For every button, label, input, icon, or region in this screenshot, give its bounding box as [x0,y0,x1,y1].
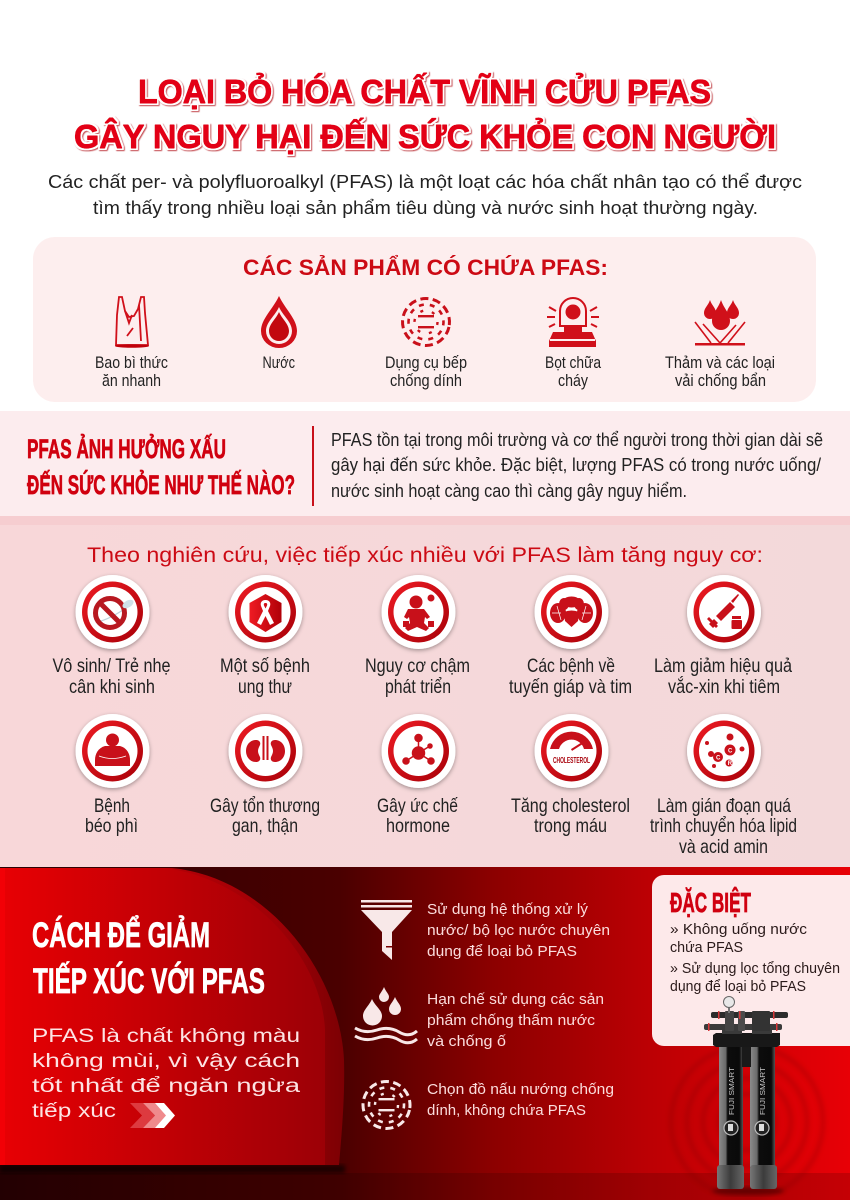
product: Fuji Smart filter: FUJI SMART [758,1067,767,1115]
risk: infertility: Vô sinh/ Trẻ nhẹ [52,655,170,677]
product label: fire foam: Bọt chữa [545,354,602,372]
product label: carpets: vải chống bẩn [675,372,766,390]
product label: carpets: Thảm và các loại [665,354,775,372]
panel: how PFAS affects health [0,411,850,525]
risk: slow development: phát triển [385,676,451,698]
risk: cancer: ung thư [238,676,292,698]
intro text: tìm thấy trong nhiều loại sản phẩm tiêu dùng và nước sinh hoạt thường ngày. [93,198,758,218]
risk: thyroid and heart [509,575,632,698]
risk: cholesterol gauge: Tăng cholesterol [511,795,630,817]
special heading: ĐẶC BIỆT [670,887,751,918]
reduce paragraph: PFAS là chất không màu [32,1026,300,1047]
risk: slow development [365,575,470,698]
reduce paragraph [32,1026,301,1122]
special text: chứa PFAS [670,940,743,956]
product label: packaging [95,354,168,390]
risk: liver and kidney [210,714,320,837]
concentric waves behind filter [671,1046,823,1198]
reduce paragraph: không mùi, vì vậy cách [32,1051,300,1072]
risk: hormone inhibition [377,714,458,837]
icon: non-stick cookware [359,1077,414,1133]
text: filter system: Sử dụng hệ thống xử lý [427,902,589,918]
risk: vaccine efficacy [654,575,792,698]
risk: obesity: béo phì [85,815,138,837]
risk: lipid and amino acid metabolism: R [728,761,733,767]
text: filter system [427,902,610,960]
risk: lipid and amino acid metabolism: và acid amin [679,836,768,858]
risk: vaccine efficacy: vắc-xin khi tiêm [668,675,780,698]
risk: lipid and amino acid metabolism: Làm gián đoạn quá [657,795,791,817]
reduce heading: TIẾP XÚC VỚI PFAS [33,961,265,1001]
risk: thyroid and heart: Các bệnh về [527,655,615,677]
section paragraph: nước sinh hoạt càng cao thì càng gây nguy hiểm. [331,480,687,501]
panel: products containing PFAS [33,237,816,402]
text: filter system: nước/ bộ lọc nước chuyên [427,923,610,939]
title: GÂY NGUY HẠI ĐẾN SỨC KHỎE CON NGƯỜI [74,118,776,155]
product label: water: Nước [262,354,295,372]
risk: cholesterol gauge: trong máu [534,815,607,837]
risk: infertility [52,575,170,698]
special text: dụng để loại bỏ PFAS [670,979,806,995]
risk: lipid and amino acid metabolism [650,714,797,858]
product label: cookware: chống dính [390,372,462,390]
risk: cholesterol gauge [511,714,630,837]
icon: plastic bag [115,297,149,348]
risk: obesity: Bệnh [94,795,130,817]
section heading: ĐẾN SỨC KHỎE NHƯ THẾ NÀO? [27,468,295,500]
icon: water drop [261,296,297,348]
risk: lipid and amino acid metabolism: trình chuyển hóa lipid [650,815,797,837]
product label: carpets [665,354,775,390]
risk: thyroid and heart: tuyến giáp và tim [509,676,632,698]
arrow: chevrons [130,1103,175,1128]
text: choose cookware: Chọn đồ nấu nướng chống [427,1082,614,1098]
icon: funnel [361,900,412,960]
risk: lipid and amino acid metabolism: C [728,748,733,754]
intro text [48,172,802,218]
risk: infertility: cân khi sinh [69,676,155,698]
title: LOẠI BỎ HÓA CHẤT VĨNH CỬU PFAS [138,73,711,110]
risk: liver and kidney: gan, thận [232,815,298,837]
risk: obesity [76,714,150,837]
icon: water drops and waves [355,987,417,1043]
special text: » Không uống nước [670,922,807,938]
section paragraph [331,429,823,501]
panel: special note [652,875,850,1046]
product label: cookware: Dụng cụ bếp [385,354,467,372]
icon: stain resistant fabric [695,300,745,346]
product: Fuji Smart filter [704,996,788,1195]
risks heading: Theo nghiên cứu, việc tiếp xúc nhiều với PFAS làm tăng nguy cơ: [87,544,763,567]
icon: fire alarm [547,298,599,347]
risk: cancer [220,575,310,698]
product label: packaging: ăn nhanh [102,372,161,390]
risk: hormone inhibition: hormone [386,815,450,837]
products heading: CÁC SẢN PHẨM CÓ CHỨA PFAS: [243,255,608,280]
product label: fire foam: cháy [558,372,589,390]
risk: lipid and amino acid metabolism: C [716,756,721,762]
special text: » Sử dụng lọc tổng chuyên [670,961,840,977]
product label: fire foam [545,354,602,390]
text: limit waterproof products: phẩm chống thấm nước [427,1013,595,1029]
text: filter system: dụng để loại bỏ PFAS [427,944,577,960]
intro text: Các chất per- và polyfluoroalkyl (PFAS) là một loạt các hóa chất nhân tạo có thể được [48,172,802,192]
title [74,73,776,155]
section heading [27,432,295,500]
reduce heading: CÁCH ĐỂ GIẢM [32,915,210,955]
reduce heading [32,915,265,1001]
risk: cancer: Một số bệnh [220,655,310,677]
special text [670,922,840,995]
text: limit waterproof products [427,992,604,1050]
risk: vaccine efficacy: Làm giảm hiệu quả [654,655,792,677]
red curved panel [0,868,344,1165]
reduce paragraph: tốt nhất để ngăn ngừa [32,1076,301,1097]
product label: packaging: Bao bì thức [95,354,168,372]
panel: health risks [0,525,850,867]
section heading: PFAS ẢNH HƯỞNG XẤU [27,432,226,464]
panel: how to reduce exposure [0,867,850,1200]
icon: non-stick pan [398,294,454,350]
risk: liver and kidney: Gây tổn thương [210,795,320,817]
text: limit waterproof products: Hạn chế sử dụng các sản [427,992,604,1008]
risk: slow development: Nguy cơ chậm [365,655,470,677]
risk: hormone inhibition: Gây ức chế [377,795,458,817]
text: choose cookware [427,1082,614,1119]
reduce paragraph: tiếp xúc [32,1101,116,1122]
text: limit waterproof products: và chống ố [427,1034,506,1050]
risk: cholesterol gauge: CHOLESTEROL [553,756,590,765]
text: choose cookware: dính, không chứa PFAS [427,1103,586,1119]
product: Fuji Smart filter: FUJI SMART [727,1067,736,1115]
product label: cookware [385,354,467,390]
